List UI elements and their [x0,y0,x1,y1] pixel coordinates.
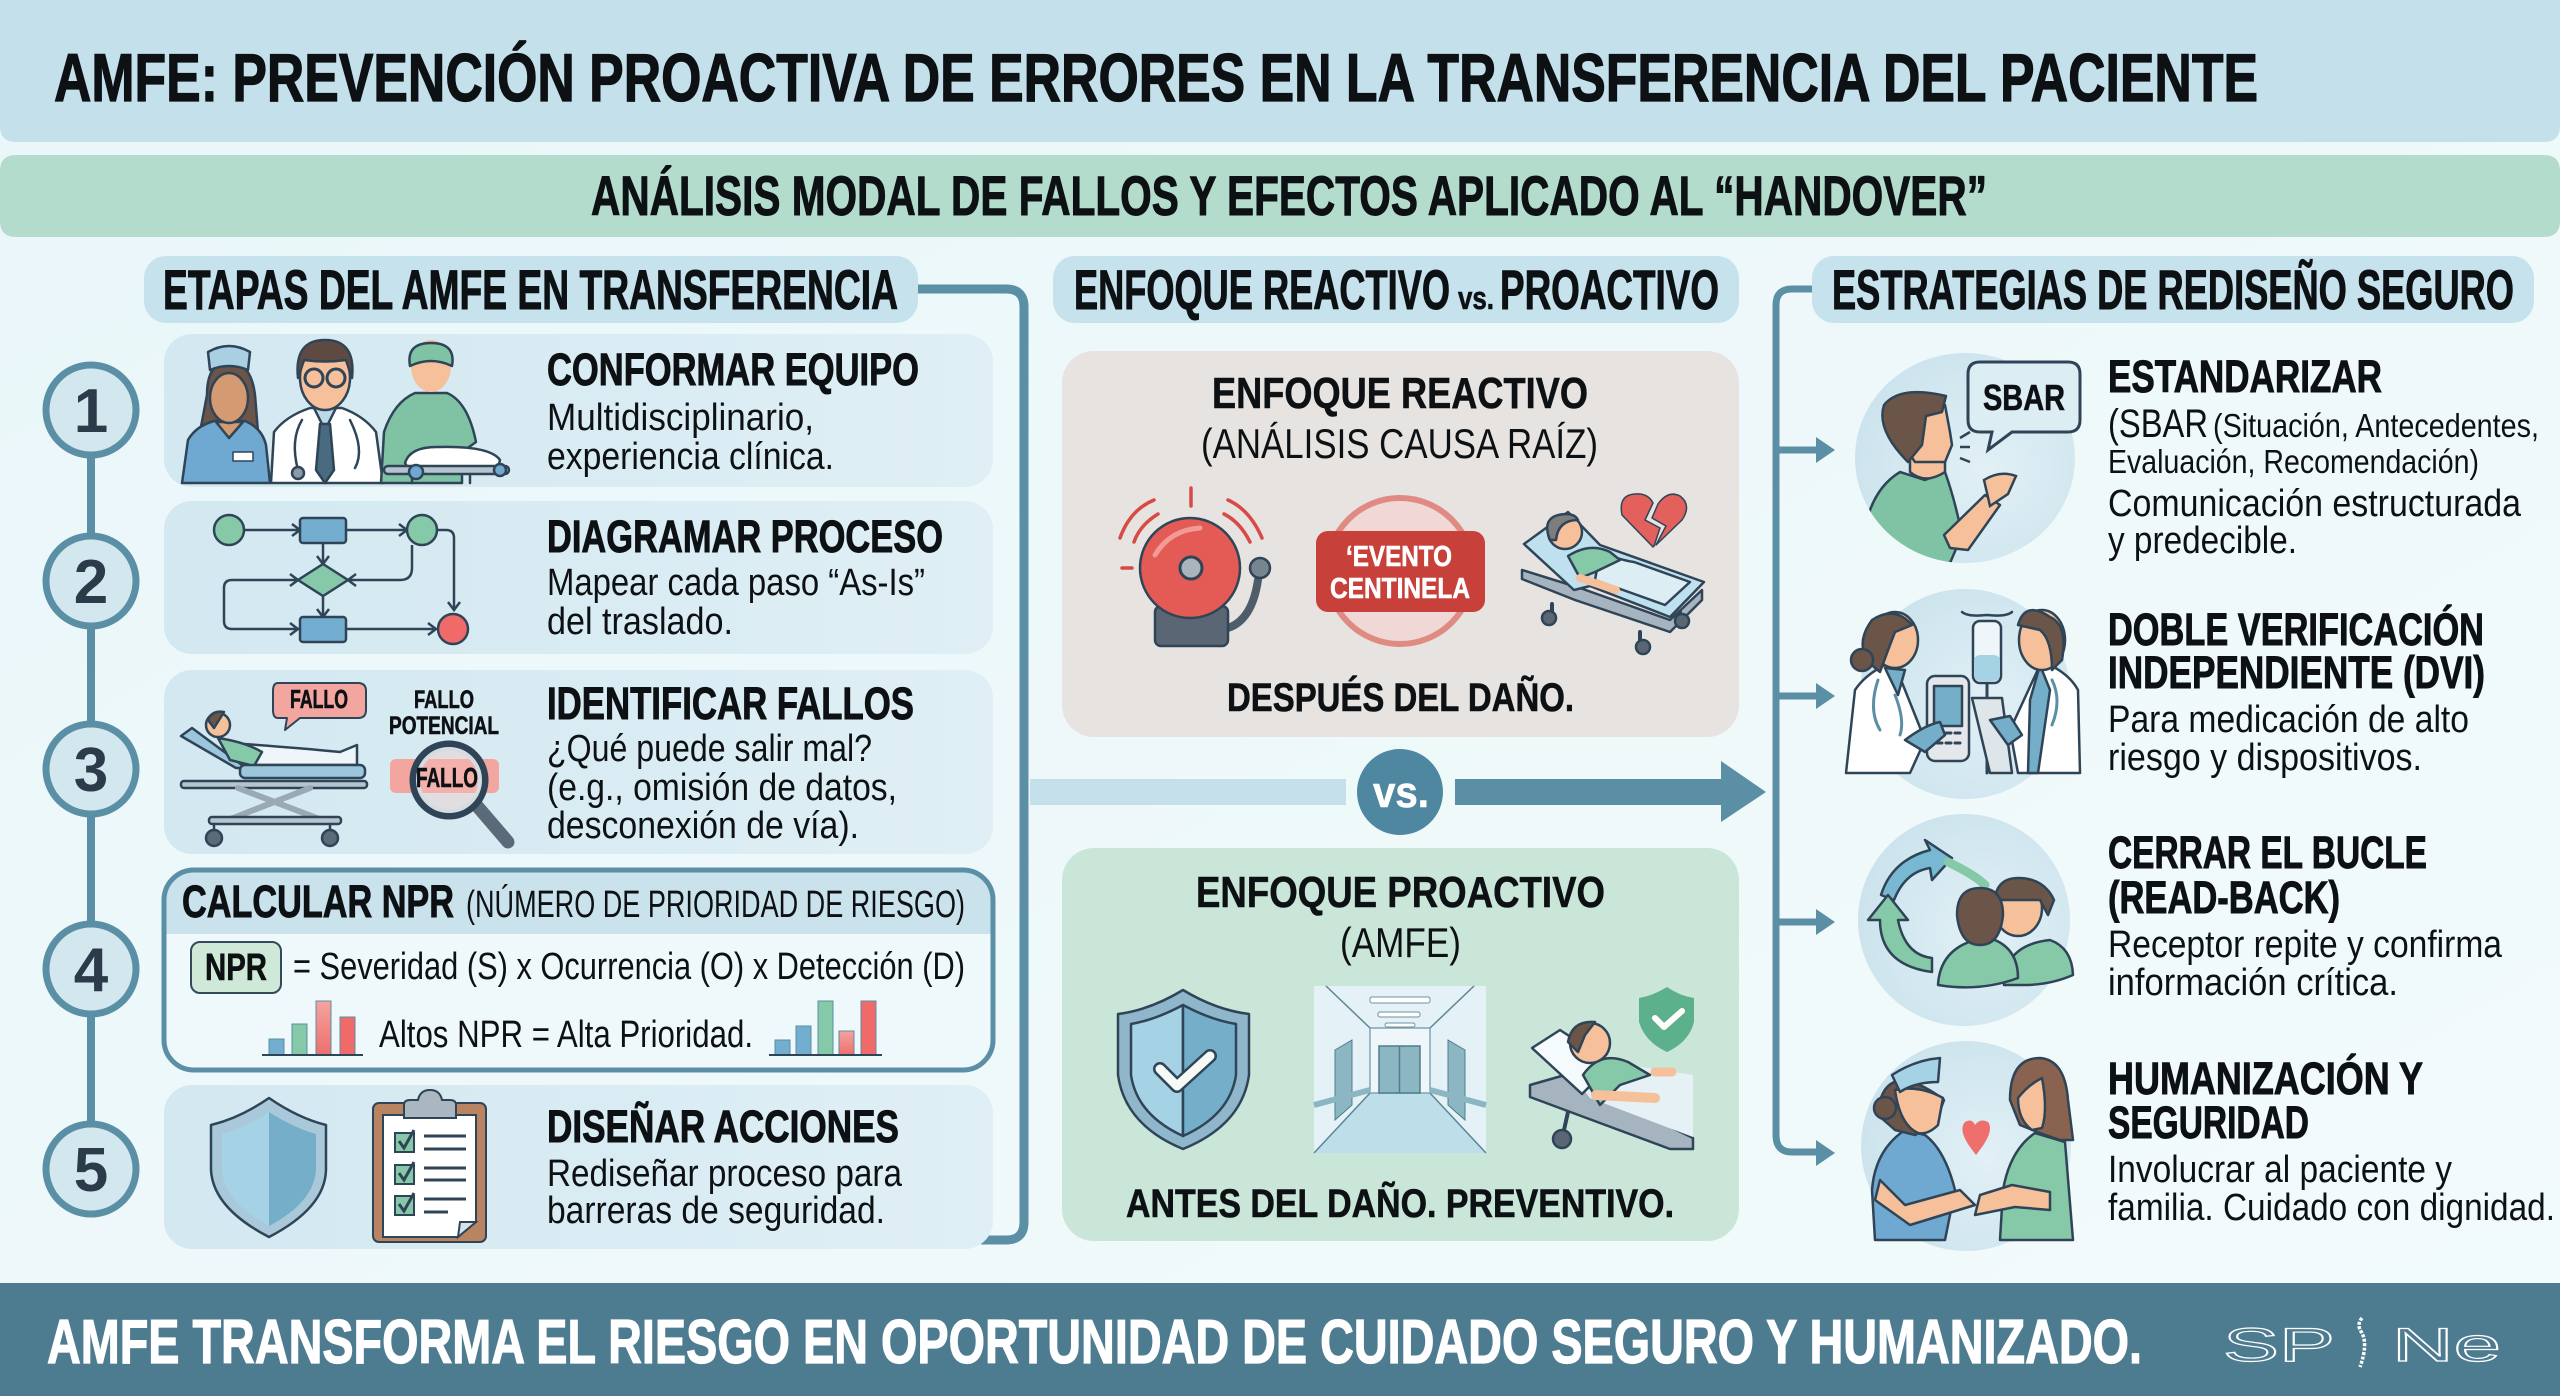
text: proactive heading: ENFOQUE PROACTIVO [1196,868,1605,917]
strategy 4: humanizacion [1861,1041,2555,1251]
text: conformar equipo: experiencia clínica. [547,436,834,478]
step number 1 [46,365,136,455]
text: cerrar el bucle: (READ-BACK) [2108,872,2340,923]
icon: nurse and patient holding hands [1861,1041,2073,1251]
formula: = Severidad (S) x Ocurrencia (O) x Detección (D) [293,946,965,988]
icon: medical team [182,340,509,483]
heading: calcular NPR: CALCULAR NPR [182,876,454,927]
text: cerrar el bucle: Receptor repite y confirma [2108,924,2503,966]
heading: etapas: ETAPAS DEL AMFE EN TRANSFERENCIA [163,258,898,321]
connector: left column bracket [918,289,1024,1240]
heading: calcular NPR [182,876,965,927]
label: fallo bubble: FALLO [290,684,348,714]
step number 4 [46,924,136,1014]
icon: person speaking SBAR [1855,353,2080,563]
text: identificar fallos: IDENTIFICAR FALLOS [547,678,914,729]
text: humanizacion: Involucrar al paciente y [2108,1149,2452,1191]
text: humanizacion: SEGURIDAD [2108,1097,2309,1148]
step number 3: 3 [74,736,108,805]
icon: process flowchart [214,515,468,644]
text: estandarizar: Comunicación estructurada [2108,483,2522,525]
label: fallo potencial: FALLO [414,686,474,714]
text: humanizacion [2108,1053,2555,1229]
heading: etapas [144,256,918,323]
text: estandarizar: (SBAR [2108,402,2208,446]
text: estandarizar: y predecible. [2108,520,2297,562]
icon: shield with check [1118,990,1249,1149]
icon: sentinel event badge: ‘EVENTO [1346,541,1452,573]
text: diagramar proceso [547,511,943,643]
icon: read-back loop [1858,814,2073,1026]
icon: sentinel event badge: CENTINELA [1330,573,1470,605]
bar chart right [769,1001,882,1055]
text: diseñar acciones: Rediseñar proceso para [547,1153,903,1195]
icon: safe patient on bed [1530,987,1694,1149]
text: reactive heading [1201,369,1598,467]
note: Altos NPR = Alta Prioridad. [379,1014,753,1056]
strategy 2: doble verificacion [1846,589,2485,799]
bar chart left [262,1001,363,1055]
logo: SPINe: SP [2223,1318,2335,1371]
text: conformar equipo: CONFORMAR EQUIPO [547,344,919,395]
icon: patient on bed [1522,494,1704,654]
timeline line [87,410,95,1169]
icon: sentinel event badge [1316,498,1485,644]
text: reactive conclusion: DESPUÉS DEL DAÑO. [1227,674,1574,720]
panel: reactive approach [1062,351,1739,737]
text: proactive heading [1196,868,1605,966]
text: diseñar acciones: barreras de seguridad. [547,1190,885,1232]
text: diagramar proceso: del traslado. [547,601,733,643]
text: estandarizar: ESTANDARIZAR [2108,351,2382,402]
text: doble verificacion [2108,604,2485,779]
arrow: vs band: vs. [1373,768,1429,817]
image: hospital corridor [1314,986,1486,1153]
panel: step 1 card [164,334,993,487]
heading: enfoque reactivo vs proactivo: PROACTIVO [1500,258,1719,321]
text: doble verificacion: riesgo y dispositivos. [2108,737,2422,779]
text: identificar fallos: (e.g., omisión de datos, [547,767,897,809]
strategy 1: estandarizar [1855,351,2539,563]
text: humanizacion: HUMANIZACIÓN Y [2108,1053,2423,1104]
text: conformar equipo: Multidisciplinario, [547,397,814,439]
text: cerrar el bucle: información crítica. [2108,962,2398,1004]
logo: SPINe [2223,1318,2501,1371]
subtitle: ANÁLISIS MODAL DE FALLOS Y EFECTOS APLICADO AL “HANDOVER” [591,164,1987,227]
text: cerrar el bucle [2108,827,2503,1004]
connector: right column with branch arrows [1776,289,1835,1166]
step number 5 [46,1124,136,1214]
step number 4: 4 [74,936,109,1005]
logo: SPINe: Ne [2392,1318,2501,1371]
label: fallo potencial [389,686,499,740]
heading: enfoque reactivo vs proactivo: vs. [1458,280,1494,316]
panel: step 5 card [164,1085,993,1249]
icon: shield [211,1098,326,1237]
icon: clipboard checklist [373,1090,486,1242]
formula badge [191,942,281,993]
strategy 3: cerrar el bucle [1858,814,2503,1026]
text: estandarizar: Evaluación, Recomendación) [2108,443,2479,480]
panel: step 4 card NPR [164,870,993,1070]
text: identificar fallos: ¿Qué puede salir mal? [547,728,872,770]
heading: enfoque reactivo vs proactivo: ENFOQUE REACTIVO [1074,258,1450,321]
text: diagramar proceso: DIAGRAMAR PROCESO [547,511,943,562]
text: reactive heading: ENFOQUE REACTIVO [1212,369,1588,418]
step number 2: 2 [74,548,108,617]
text: reactive heading: (ANÁLISIS CAUSA RAÍZ) [1201,420,1598,467]
heading: calcular NPR: (NÚMERO DE PRIORIDAD DE RIESGO) [466,883,965,926]
title banner [0,0,2560,142]
step number 2 [46,536,136,626]
text: doble verificacion: Para medicación de alto [2108,699,2469,741]
text: diagramar proceso: Mapear cada paso “As-Is” [547,562,925,604]
arrow: vs band [1030,749,1766,835]
text: proactive heading: (AMFE) [1340,919,1461,966]
icon: alarm bell [1120,488,1270,646]
formula badge: NPR [205,947,267,989]
panel: proactive approach [1062,848,1739,1241]
footer banner [0,1283,2560,1396]
text: conformar equipo [547,344,919,478]
label: fallo potencial: POTENCIAL [389,712,499,740]
text: identificar fallos: desconexión de vía). [547,805,859,847]
panel: step 3 card [164,670,993,854]
icon: magnifier: FALLO [416,762,478,793]
text: diseñar acciones: DISEÑAR ACCIONES [547,1101,899,1152]
panel: step 2 card [164,501,993,654]
text: identificar fallos [547,678,914,847]
icon: two clinicians with pump [1846,589,2080,799]
text: proactive conclusion: ANTES DEL DAÑO. PREVENTIVO. [1126,1180,1674,1226]
step number 3 [46,724,136,814]
text: cerrar el bucle: CERRAR EL BUCLE [2108,827,2427,878]
subtitle banner [0,155,2560,237]
text: diseñar acciones [547,1101,903,1232]
icon: magnifier [413,744,508,842]
icon: person speaking SBAR: SBAR [1983,377,2065,418]
text: estandarizar [2108,351,2539,562]
step number 1: 1 [74,377,108,446]
step number 5: 5 [74,1136,108,1205]
icon: patient on stretcher with fallo bubble [181,683,499,846]
